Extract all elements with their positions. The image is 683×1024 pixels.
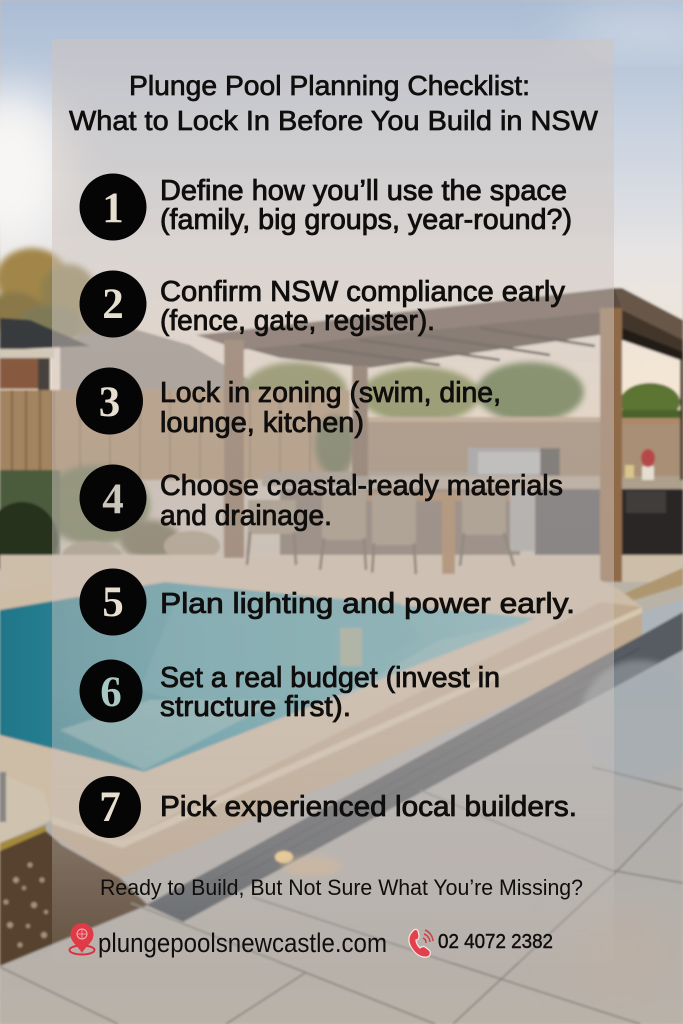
checklist item 2: Confirm NSW compliance early xyxy=(160,276,566,308)
checklist item 6 xyxy=(80,660,500,723)
checklist item 6: structure first). xyxy=(160,691,351,723)
checklist item 2: 2 xyxy=(102,281,124,328)
checklist item 1: Define how you’ll use the space xyxy=(160,175,567,207)
title: Plunge Pool Planning Checklist: xyxy=(129,70,530,101)
checklist item 3: lounge, kitchen) xyxy=(160,407,364,439)
checklist item 7: Pick experienced local builders. xyxy=(160,791,577,823)
checklist item 3: Lock in zoning (swim, dine, xyxy=(160,377,501,409)
checklist item 4: Choose coastal-ready materials xyxy=(160,470,563,502)
checklist item 6: Set a real budget (invest in xyxy=(160,662,500,694)
checklist item 4: 4 xyxy=(102,476,124,523)
checklist item 5: Plan lighting and power early. xyxy=(160,588,575,620)
phone number: 02 4072 2382 xyxy=(438,930,553,953)
checklist item 1: 1 xyxy=(102,185,124,232)
checklist item 4: and drainage. xyxy=(160,500,332,532)
title xyxy=(69,70,598,136)
checklist item 7: 7 xyxy=(99,784,121,831)
checklist item 5 xyxy=(80,568,575,636)
checklist item 7 xyxy=(79,776,577,838)
website: plungepoolsnewcastle.com xyxy=(98,928,387,958)
checklist item 1: (family, big groups, year-round?) xyxy=(160,204,572,236)
checklist item 3 xyxy=(76,368,501,439)
icon: phone xyxy=(409,929,433,957)
call to action text: Ready to Build, But Not Sure What You’re Missing? xyxy=(100,875,583,900)
checklist item 1 xyxy=(80,174,572,240)
checklist item 3: 3 xyxy=(99,379,120,426)
checklist item 2 xyxy=(80,270,566,338)
checklist item 4 xyxy=(80,464,563,532)
checklist item 5: 5 xyxy=(102,579,124,626)
title: What to Lock In Before You Build in NSW xyxy=(69,105,598,136)
checklist item 2: (fence, gate, register). xyxy=(160,305,435,337)
translucent panel xyxy=(52,39,614,963)
checklist item 6: 6 xyxy=(100,669,122,716)
icon: location pin xyxy=(70,923,94,954)
